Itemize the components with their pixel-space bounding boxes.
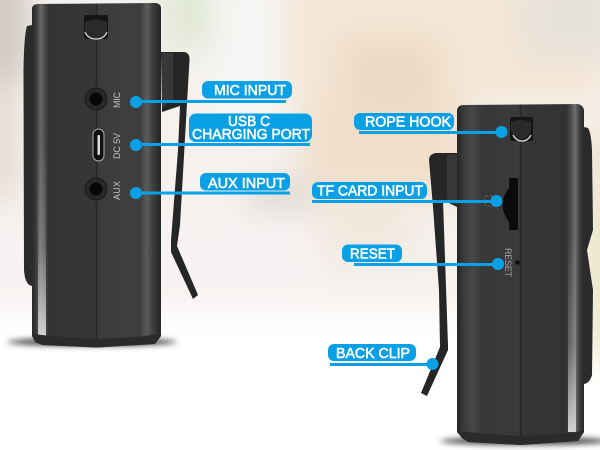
left belt clip	[161, 52, 198, 299]
label line 2: CHARGING PORT	[192, 126, 310, 143]
right body highlight	[568, 240, 576, 432]
right bottom chamfer	[457, 431, 584, 445]
left floor shadow	[7, 338, 177, 346]
callout: tf card input	[312, 182, 502, 207]
label line 1: USB C	[228, 113, 270, 130]
label: AUX INPUT	[208, 175, 285, 192]
leader line	[359, 131, 501, 134]
label: BACK CLIP	[336, 345, 410, 362]
label: RESET	[350, 246, 395, 262]
aux jack	[85, 178, 107, 200]
left device: side view	[7, 3, 198, 348]
leader line	[312, 200, 497, 203]
DC 5V engraved label: DC 5V	[112, 133, 122, 159]
callout: usb c charging port	[130, 113, 312, 151]
leader line	[136, 143, 310, 146]
reset hole	[515, 260, 520, 265]
callout: mic input	[130, 81, 292, 108]
usb c port	[93, 129, 104, 161]
left body	[32, 3, 161, 348]
callout: reset	[342, 244, 504, 270]
TF engraved icon	[485, 196, 495, 206]
pill	[342, 244, 402, 262]
pill	[200, 173, 290, 190]
label: MIC INPUT	[214, 82, 286, 99]
AUX engraved label: AUX	[112, 181, 122, 200]
callout: rope hook	[354, 113, 508, 138]
left rope hook	[84, 15, 108, 39]
pill	[354, 113, 454, 130]
mic jack	[85, 88, 107, 110]
MIC engraved label: MIC	[112, 92, 122, 108]
RESET engraved label: RESET	[503, 248, 513, 278]
leader line	[354, 263, 498, 266]
dot	[490, 195, 502, 207]
dot	[496, 126, 508, 138]
right floor shadow	[440, 437, 600, 445]
dot	[130, 187, 142, 199]
left back plate	[24, 25, 32, 286]
pill	[312, 182, 427, 199]
pill	[202, 81, 292, 98]
right back plate	[584, 127, 593, 384]
right belt clip	[421, 153, 457, 396]
pill	[328, 344, 416, 361]
callout: aux input	[130, 173, 290, 199]
label: TF CARD INPUT	[317, 182, 423, 200]
left body highlight	[38, 140, 46, 336]
leader line	[136, 192, 290, 194]
dot	[492, 258, 504, 270]
right device: side view	[421, 104, 600, 445]
dot	[130, 96, 142, 108]
right rope hook	[510, 117, 533, 141]
dot	[130, 139, 142, 151]
leader line	[330, 363, 432, 366]
pill	[189, 114, 312, 142]
leader line	[136, 100, 286, 103]
callout: back clip	[328, 344, 438, 370]
TF card slot	[502, 178, 518, 230]
label: ROPE HOOK	[365, 114, 451, 130]
dot	[426, 358, 438, 370]
left bottom chamfer	[32, 334, 161, 348]
right body	[457, 104, 584, 445]
